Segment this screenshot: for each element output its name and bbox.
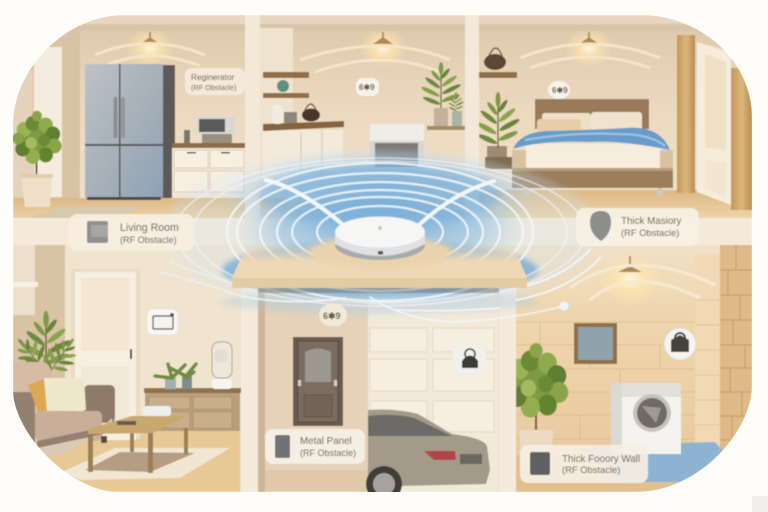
signal badge [548, 81, 570, 99]
signal badge [356, 78, 379, 96]
label: thick foundry wall [520, 445, 648, 483]
central roof platform [232, 236, 527, 293]
bed [512, 99, 673, 196]
label: living room: Living Room [120, 222, 179, 234]
car [366, 410, 490, 502]
lower signal wisps [160, 250, 600, 322]
metal panel door [293, 337, 343, 426]
lamp [520, 28, 660, 68]
lower columns [241, 285, 516, 492]
label: living room [69, 214, 194, 251]
label: metal panel [265, 429, 365, 464]
corner marker [752, 496, 768, 512]
lamp [300, 28, 450, 72]
wall shelf with plant [420, 62, 465, 130]
potted plant [12, 111, 62, 207]
door [71, 269, 140, 440]
air purifier [212, 342, 232, 389]
label: thick foundry wall: (RF Obstacle) [562, 464, 620, 475]
ceiling frame [86, 16, 683, 24]
side cabinet [144, 388, 241, 431]
sofa [13, 362, 115, 455]
lamp [570, 254, 715, 306]
plant behind sofa [17, 310, 77, 372]
stove [370, 124, 424, 174]
label: refrigerator: Reginerator [191, 72, 235, 82]
counter with cabinets [262, 102, 344, 172]
wall device badge [147, 309, 178, 335]
signal badge: metal room: 6✱9 [323, 311, 341, 321]
coffee table [88, 406, 188, 473]
signal badge: 6✱9 [359, 83, 375, 92]
panel: fridge kitchen room [12, 24, 245, 220]
label: refrigerator: (RF Obstacle) [191, 83, 236, 92]
wifi signal waves [162, 150, 598, 314]
label: thick masonry [576, 208, 699, 246]
panel: metal panel room [258, 290, 368, 492]
panel: garage [366, 304, 498, 492]
router [335, 216, 425, 260]
label: refrigerator [185, 68, 245, 95]
shelves with jars [263, 72, 309, 98]
panel: living room [5, 245, 241, 492]
panel: bedroom [475, 24, 752, 218]
signal arcs from router [266, 180, 494, 224]
label: thick masonry: (RF Obstacle) [621, 227, 679, 238]
floor beam between storeys [13, 218, 752, 245]
signal badge: metal room [319, 304, 347, 326]
signal badge: 6✱9 [552, 86, 568, 95]
label: metal panel: Metal Panel [300, 436, 352, 447]
refrigerator [85, 64, 175, 200]
shelf with kettle [479, 48, 517, 78]
curtains and door [677, 35, 752, 210]
panel: kitchen room [260, 24, 465, 218]
rug [62, 448, 230, 480]
label: thick masonry: Thick Masiory [621, 216, 682, 227]
label: living room: (RF Obstacle) [120, 235, 177, 245]
wall icon badge [664, 328, 696, 360]
label: thick foundry wall: Thick Fooory Wall [562, 454, 640, 465]
plants on cabinet [155, 364, 196, 389]
lamp [94, 32, 206, 67]
framed picture [574, 323, 617, 364]
label: metal panel: (RF Obstacle) [300, 448, 356, 458]
bedroom plant [475, 92, 527, 169]
base cabinet and microwave [172, 117, 245, 198]
washing machine [580, 383, 735, 482]
panel: laundry room [504, 245, 752, 492]
wall columns upper [245, 15, 480, 180]
signal badge: garage [453, 345, 486, 373]
laundry plant [504, 343, 568, 462]
